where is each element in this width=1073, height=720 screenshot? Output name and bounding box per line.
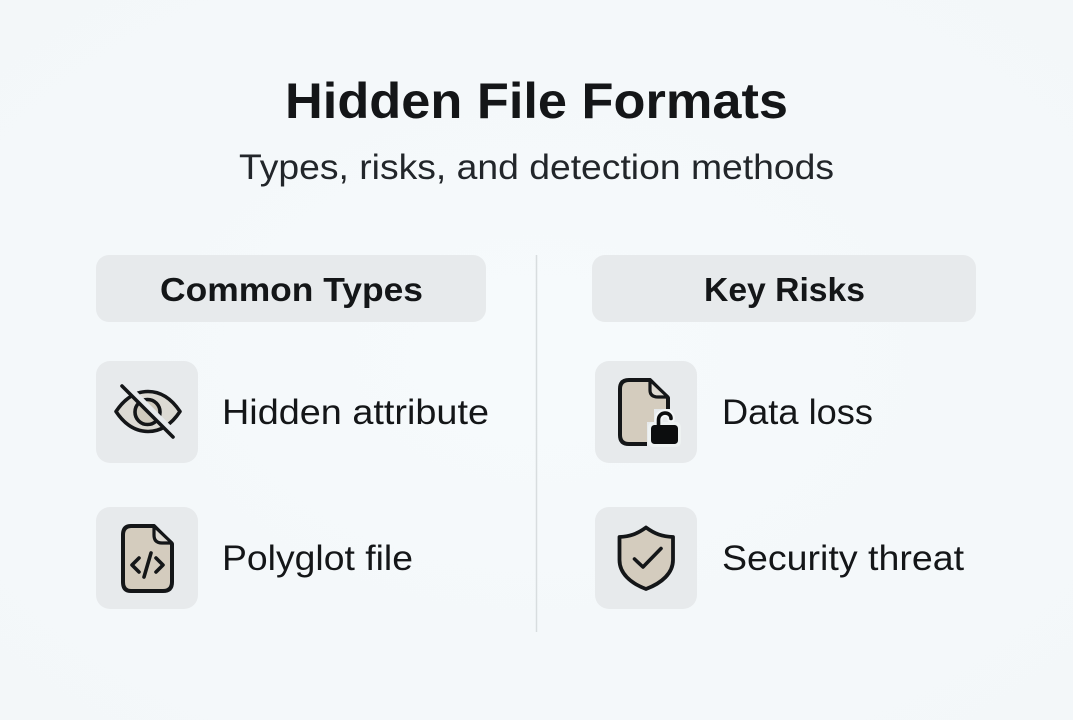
item: data loss xyxy=(595,361,873,463)
icon: code file xyxy=(123,526,172,591)
label: polyglot file: Polyglot file xyxy=(222,539,413,578)
label: hidden attribute: Hidden attribute xyxy=(222,393,489,432)
item: security threat xyxy=(595,507,964,609)
item: hidden attribute xyxy=(96,361,489,463)
title: Hidden File Formats xyxy=(285,73,788,129)
panel: common types xyxy=(96,255,489,609)
heading: common types: Common Types xyxy=(160,271,423,308)
heading: key risks xyxy=(592,255,976,322)
panel: key risks xyxy=(592,255,976,609)
item: polyglot file xyxy=(96,507,413,609)
heading: common types xyxy=(96,255,486,322)
heading: key risks: Key Risks xyxy=(704,271,865,308)
label: data loss: Data loss xyxy=(722,393,873,432)
label: security threat: Security threat xyxy=(722,539,964,578)
icon: shield with check xyxy=(620,528,673,589)
icon: crossed-out eye xyxy=(116,384,180,437)
icon: file with open lock xyxy=(620,380,684,449)
subtitle: Types, risks, and detection methods xyxy=(239,148,834,187)
